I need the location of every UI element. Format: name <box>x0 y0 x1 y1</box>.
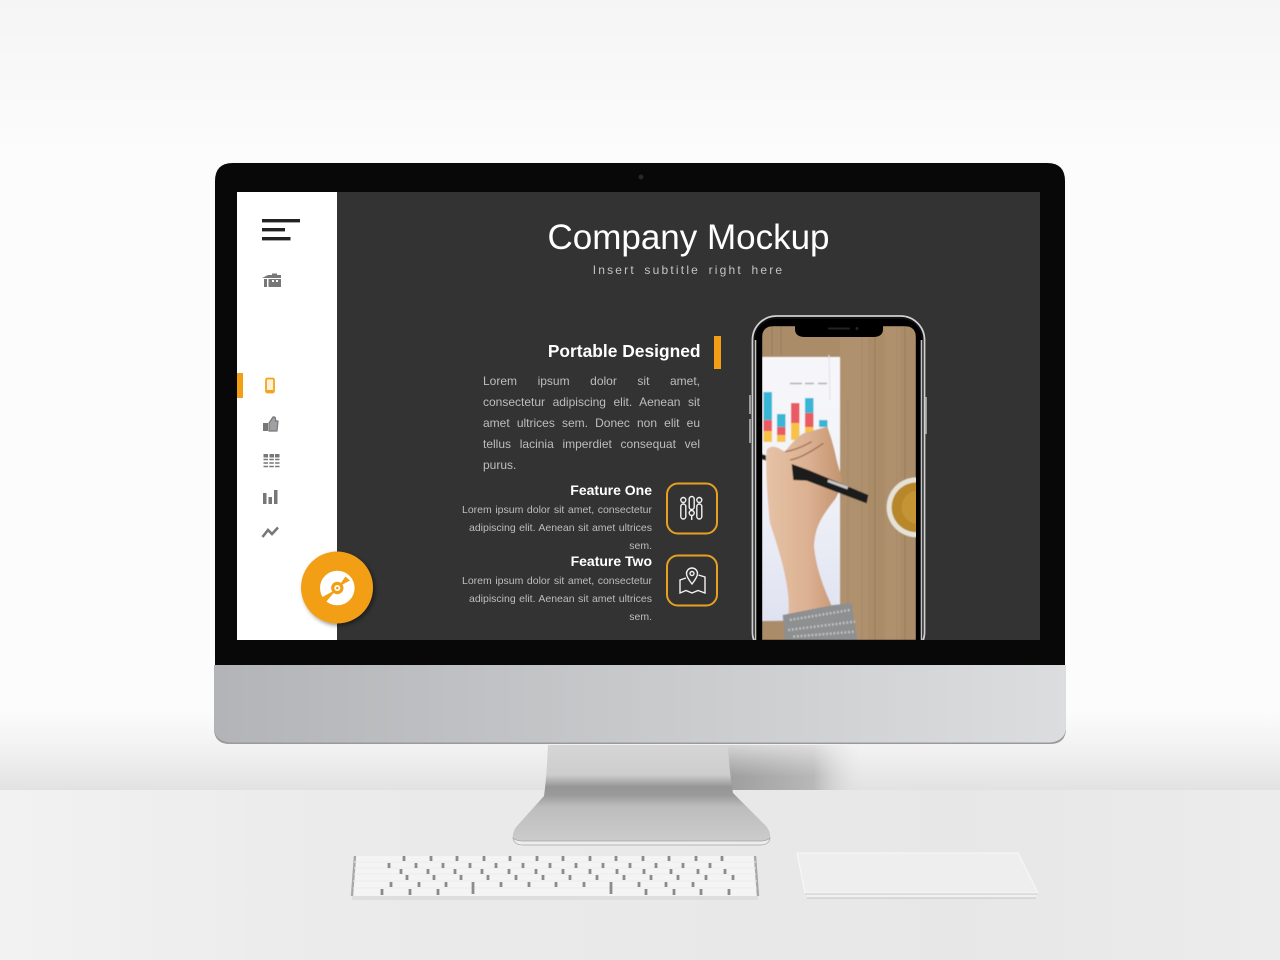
phone photo <box>762 326 916 640</box>
chart legend <box>790 382 827 384</box>
title: Company Mockup <box>547 218 830 257</box>
accent bar <box>714 336 721 369</box>
icon: table grid <box>264 454 280 466</box>
phone notch <box>795 325 883 337</box>
icon: bar chart <box>263 490 278 504</box>
body paragraph: purus. <box>483 458 516 472</box>
icon: trend line <box>262 528 278 537</box>
monitor body <box>213 161 1067 744</box>
icon: phone <box>266 378 274 392</box>
feature one text: adipiscing elit. Aenean sit amet ultrices <box>469 522 652 534</box>
feature two text: sem. <box>629 611 652 623</box>
body paragraph: Lorem ipsum dolor sit amet, <box>483 374 700 388</box>
keyboard <box>352 856 758 900</box>
icon: map pin in rounded box <box>667 556 717 606</box>
chart bars <box>764 392 828 442</box>
icon: thumbs up <box>263 417 278 431</box>
icon: sliders in rounded box <box>667 484 717 534</box>
screen background <box>237 192 1040 640</box>
hand with pen <box>762 427 868 640</box>
sidebar panel <box>237 192 337 640</box>
section heading: Portable Designed: Portable Designed <box>548 341 700 361</box>
feature two text: Lorem ipsum dolor sit amet, consectetur <box>462 575 652 587</box>
feature two heading: Feature Two <box>571 553 652 569</box>
body paragraph: tellus lacinia imperdiet consequat vel <box>483 437 700 451</box>
body paragraph <box>483 374 700 472</box>
body paragraph: consectetur adipiscing elit. Aenean sit <box>483 395 700 409</box>
phone mockup <box>749 315 927 640</box>
feature two text <box>462 553 652 623</box>
floating disc button <box>301 552 373 624</box>
feature one text: sem. <box>629 540 652 552</box>
monitor stand <box>513 745 770 845</box>
icon: menu <box>262 219 300 240</box>
feature one heading: Feature One <box>570 482 652 498</box>
feature two text: adipiscing elit. Aenean sit amet ultrices <box>469 593 652 605</box>
icon: home toolbox <box>262 274 281 287</box>
feature one text <box>462 482 652 552</box>
sidebar icons <box>262 219 927 640</box>
trackpad <box>797 853 1038 898</box>
body paragraph: amet ultrices sem. Donec non elit eu <box>483 416 700 430</box>
desk surface <box>0 790 1280 960</box>
coffee cup <box>886 476 916 538</box>
feature one text: Lorem ipsum dolor sit amet, consectetur <box>462 504 652 516</box>
active menu marker <box>237 373 242 398</box>
stand shadow on wall <box>728 745 844 790</box>
subtitle: Insert subtitle right here <box>593 263 784 277</box>
